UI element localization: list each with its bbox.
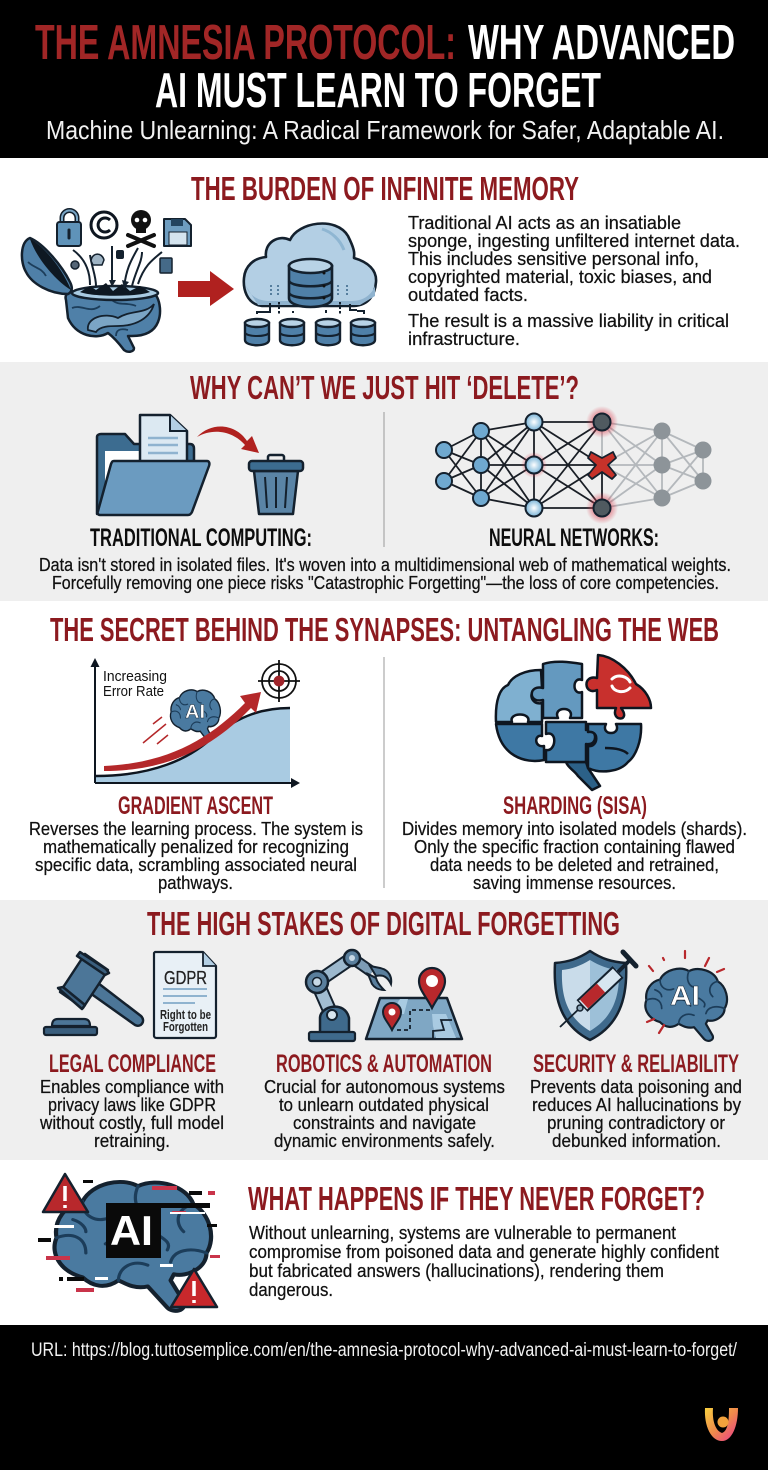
text block: delete explanation [39,554,731,593]
text block: burden: infrastructure. [408,328,520,349]
card: robotics and automation: constraints and navigate [293,1112,476,1133]
text block: gradient ascent: pathways. [158,872,233,893]
subheading: sharding: SHARDING (SISA) [503,792,647,820]
card: security and reliability: Prevents data poisoning and [530,1076,742,1097]
card: legal compliance: privacy laws like GDPR [48,1094,216,1115]
card: legal compliance: retraining. [94,1130,170,1151]
card: security and reliability: debunked information. [552,1130,721,1151]
panel: high stakes [0,900,768,1160]
icon: logo [705,1408,738,1441]
card: security and reliability [530,1050,742,1151]
card: robotics and automation: Crucial for autonomous systems [264,1076,505,1097]
panel: secret behind the synapses [0,601,768,900]
icon: map pins [383,968,445,1030]
card: legal compliance: LEGAL COMPLIANCE [49,1050,216,1078]
panel: what happens if they never forget [0,1160,768,1325]
text block: burden: outdated facts. [408,284,528,305]
chart: gradient ascent [90,658,300,788]
text block: sharding: data needs to be deleted and retrained, [430,854,719,875]
text block: gradient ascent: Reverses the learning process. The system is [29,818,363,839]
icon: corrupted AI brain with warnings [38,1174,220,1311]
text block: never forget: dangerous. [249,1279,333,1300]
icon: AI brain: AI [185,702,205,723]
subheading: gradient ascent: GRADIENT ASCENT [118,792,273,820]
text block: gradient ascent [29,818,363,893]
text block: sharding [402,818,747,893]
text block: gradient ascent: mathematically penalized for recognizing [43,836,349,857]
card: robotics and automation: dynamic environments safely. [274,1130,495,1151]
icon: open brain ingesting data [22,210,191,352]
card: security and reliability: reduces AI hallucinations by [532,1094,742,1115]
text block: burden: This includes sensitive personal info, [408,248,699,269]
panel: why can't we just hit delete [0,362,768,601]
icon: warning triangle bottom [171,1269,217,1307]
text block: burden: sponge, ingesting unfiltered internet data. [408,230,740,251]
card: robotics and automation: to unlearn outdated physical [279,1094,489,1115]
footer band [0,1325,768,1470]
icon: gavel and GDPR document: GDPR [164,968,207,988]
heading: burden: THE BURDEN OF INFINITE MEMORY [191,170,579,207]
icon: skull and crossbones [128,210,154,246]
icon: folder with file and trash [97,415,303,515]
text block: sharding: Only the specific fraction containing flawed [414,836,735,857]
icon: gavel and GDPR document [44,952,216,1038]
header band [0,0,768,158]
icon: shield with syringe and AI brain [555,951,727,1041]
text block: sharding: saving immense resources. [473,872,676,893]
text block: burden: copyrighted material, toxic biases, and [408,266,712,287]
text block: never forget: compromise from poisoned data and generate highly confident [249,1241,719,1262]
title: THE AMNESIA PROTOCOL: [35,16,456,70]
icon: puzzle brain [496,655,651,790]
icon: padlock [57,210,81,246]
title [35,16,735,118]
icon: gavel and GDPR document: Right to be [160,1008,211,1022]
icon: target [258,660,300,702]
icon: trash bin [249,455,303,514]
card: legal compliance [39,1050,224,1151]
label: traditional computing: TRADITIONAL COMPUTING: [90,524,312,552]
icon: refresh arrows [612,676,630,692]
icon: robotic arm and map [306,950,462,1041]
icon: shield with syringe and AI brain: AI [670,980,700,1011]
icon: cloud database [244,224,376,345]
chart: gradient ascent: Increasing [103,668,167,685]
text block: never forget: Without unlearning, systems are vulnerable to permanent [249,1222,676,1243]
chart: gradient ascent: Error Rate [103,683,164,700]
text block: burden: The result is a massive liability in critical [408,310,729,331]
label: neural networks: NEURAL NETWORKS: [489,524,659,552]
icon: warning triangle top [43,1174,88,1212]
card: security and reliability: pruning contradictory or [547,1112,725,1133]
card: legal compliance: Enables compliance with [40,1076,224,1097]
arrow: curved red to trash [197,426,259,453]
icon: gavel and GDPR document: Forgotten [163,1020,208,1034]
card: legal compliance: without costly, full model [39,1112,224,1133]
icon: floppy disk [164,219,191,246]
text block: never forget: but fabricated answers (hallucinations), rendering them [249,1260,664,1281]
text block: burden: Traditional AI acts as an insatiable [408,212,681,233]
icon: copyright [91,212,117,238]
icon: red X [588,452,616,479]
icon: corrupted AI brain with warnings: AI [110,1207,153,1254]
card: robotics and automation [264,1050,505,1151]
heading: delete: WHY CAN’T WE JUST HIT ‘DELETE’? [190,369,579,406]
card: robotics and automation: ROBOTICS & AUTOMATION [276,1050,492,1078]
text block: never forget [249,1222,719,1300]
text block: burden [408,212,740,349]
panel: the burden of infinite memory [0,158,768,362]
chart: neural network with deleted node [436,406,712,524]
icon: AI brain [170,690,220,741]
text block: gradient ascent: specific data, scrambling associated neural [35,854,357,875]
arrow: red right [178,271,234,306]
